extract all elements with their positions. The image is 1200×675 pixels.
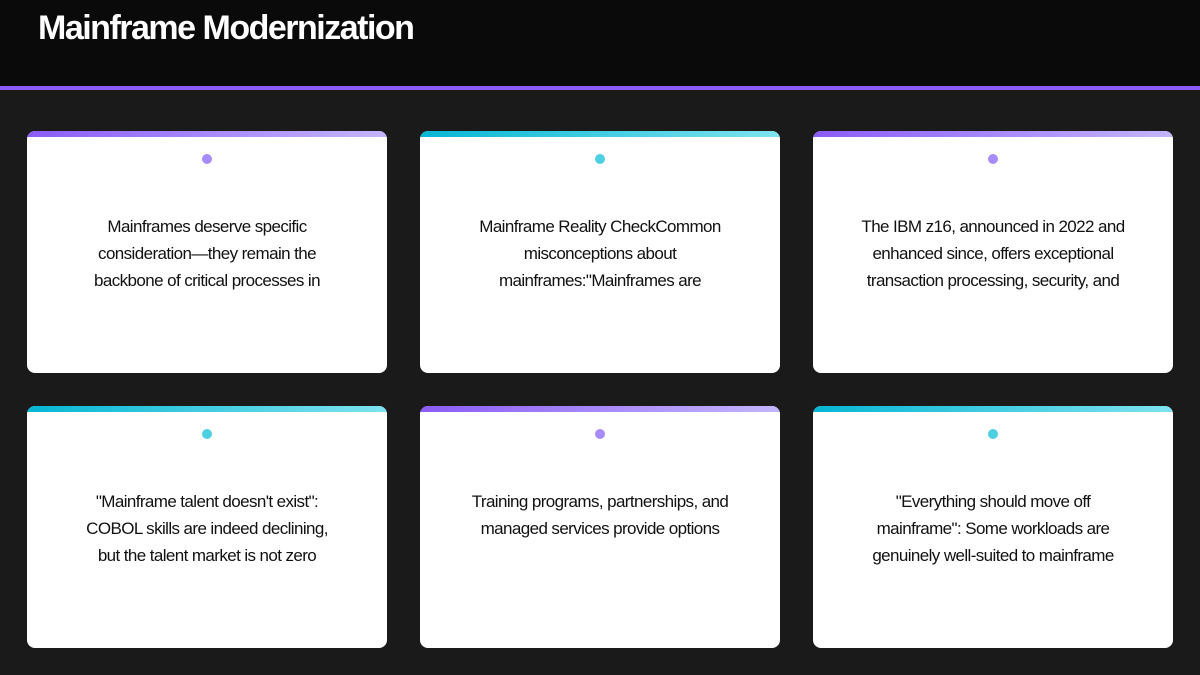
icon: dot bbox=[595, 154, 605, 164]
icon: dot bbox=[988, 429, 998, 439]
card 2 bbox=[420, 131, 780, 373]
icon: dot bbox=[595, 429, 605, 439]
text block: Mainframe Reality CheckCommon misconceptions about mainframes:"Mainframes are bbox=[479, 217, 721, 290]
icon: dot bbox=[202, 429, 212, 439]
card 4 bbox=[27, 406, 387, 648]
text block: "Mainframe talent doesn't exist": COBOL skills are indeed declining, but the talent market is not zero bbox=[86, 492, 328, 565]
icon: dot bbox=[202, 154, 212, 164]
text block: "Everything should move off mainframe": Some workloads are genuinely well-suited to mainframe bbox=[872, 492, 1114, 565]
icon: dot bbox=[988, 154, 998, 164]
header bbox=[0, 0, 1200, 86]
text block: Mainframes deserve specific consideration—they remain the backbone of critical processes in bbox=[94, 217, 320, 290]
card 5 bbox=[420, 406, 780, 648]
card 1 bbox=[27, 131, 387, 373]
card 3 bbox=[813, 131, 1173, 373]
title: Mainframe Modernization bbox=[38, 9, 413, 47]
text block: Training programs, partnerships, and managed services provide options bbox=[472, 492, 728, 538]
card 6 bbox=[813, 406, 1173, 648]
text block: The IBM z16, announced in 2022 and enhanced since, offers exceptional transaction processing, security, and bbox=[861, 217, 1125, 290]
